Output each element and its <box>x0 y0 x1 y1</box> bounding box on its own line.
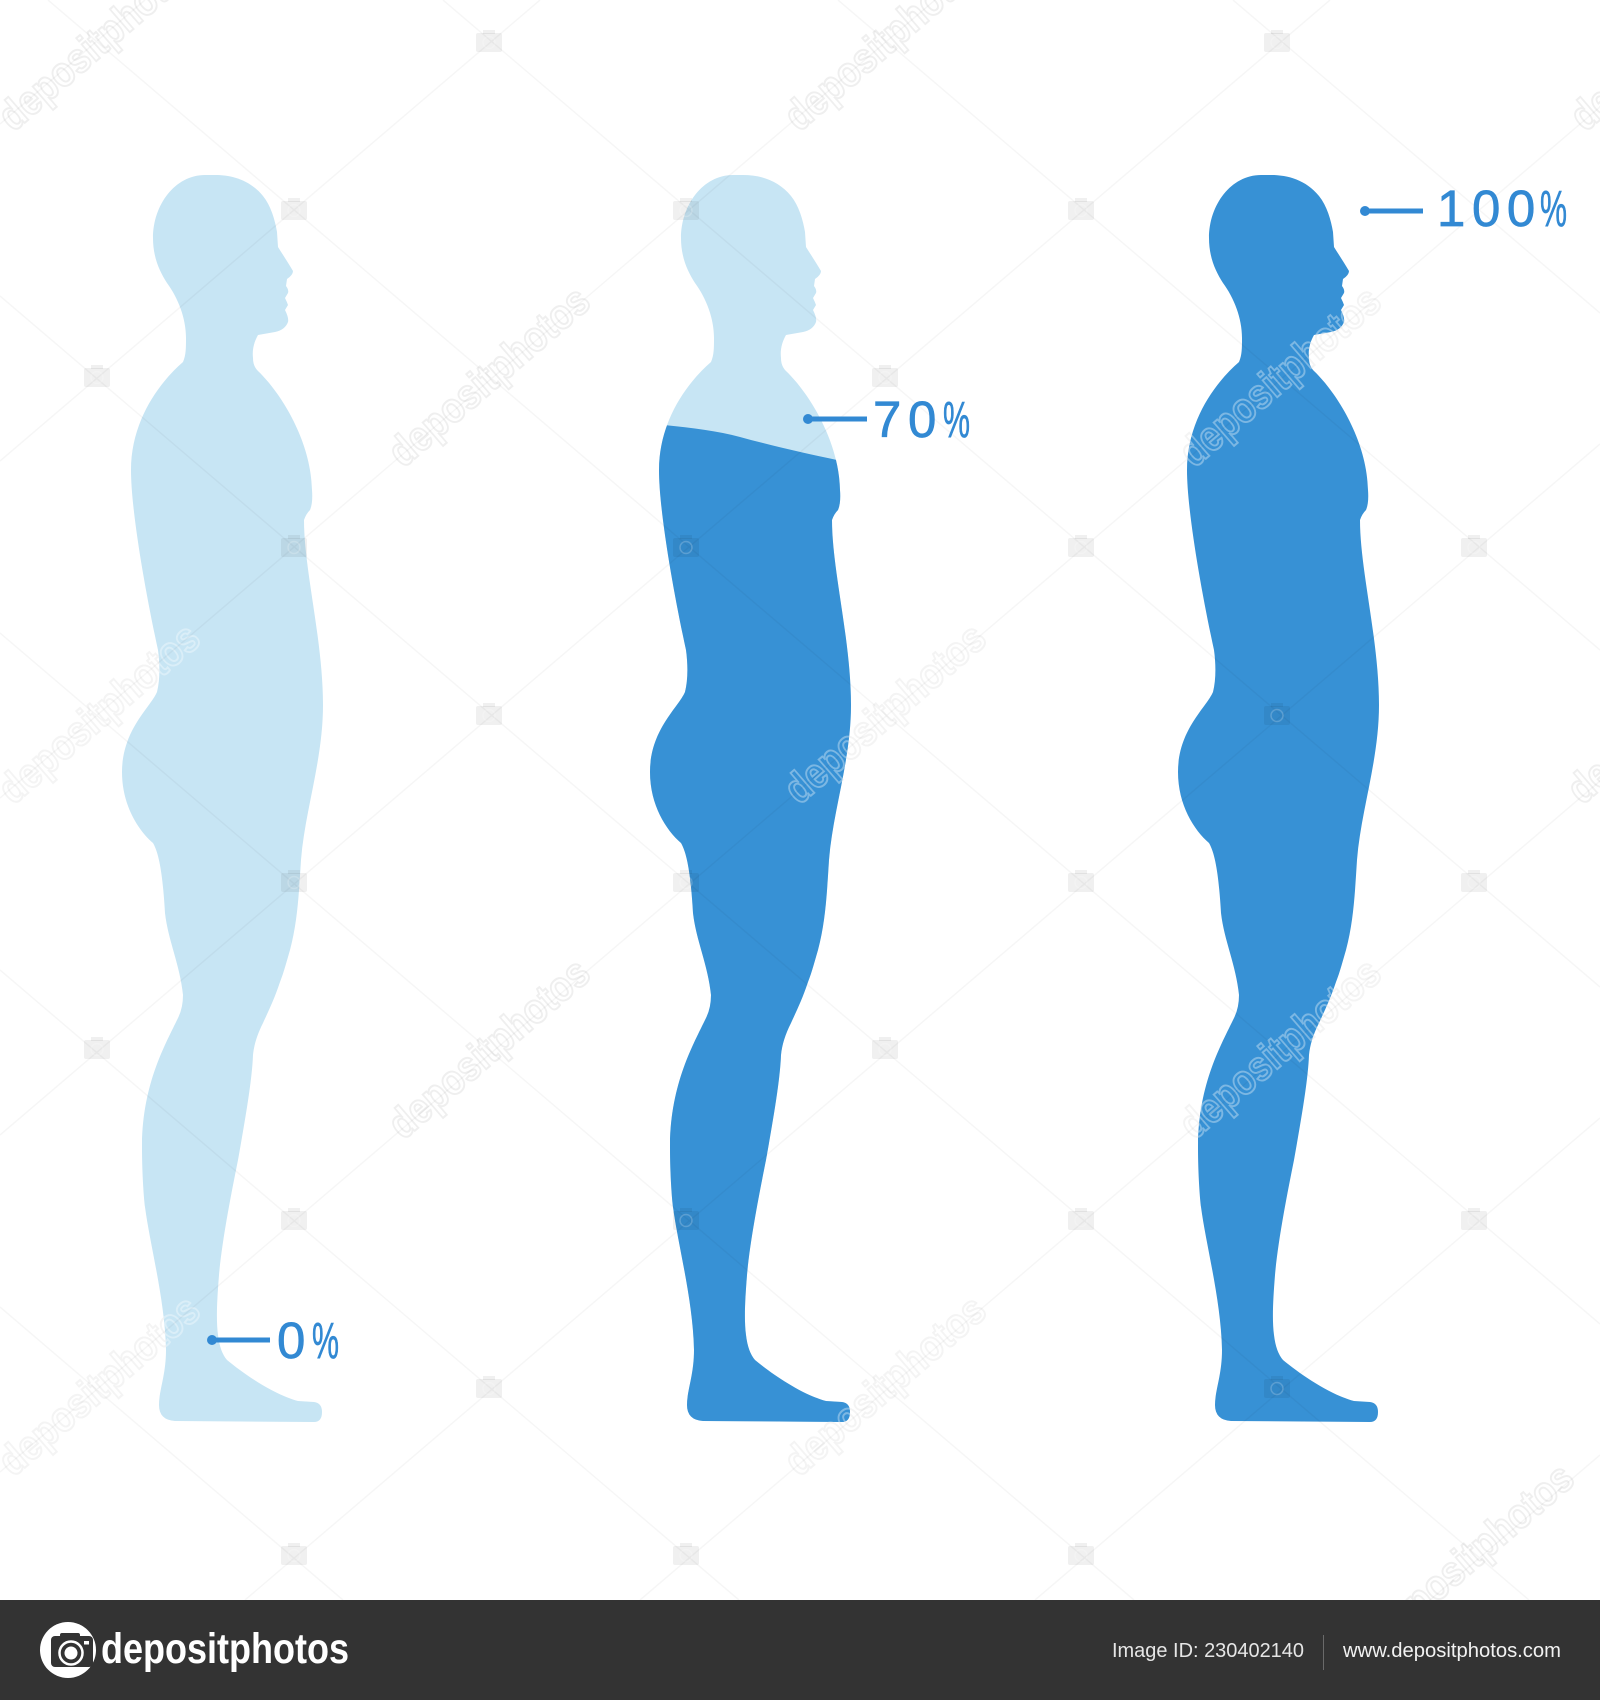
figure: 100% hydration, fully filled silhouette <box>1178 175 1379 1422</box>
callout: 0% <box>207 1312 339 1369</box>
watermark text over figures: depositphotos <box>775 1286 995 1484</box>
watermark text behind figures: depositphotos <box>1170 949 1390 1147</box>
figure: 70% hydration, filled to the chest <box>650 175 851 1422</box>
watermark text behind figures: depositphotos <box>379 949 599 1147</box>
watermark text over figures <box>0 277 1390 1484</box>
callout: 0%: 0 <box>277 1312 305 1369</box>
watermark text over figures: depositphotos <box>1170 277 1390 475</box>
website url: www.depositphotos.com <box>1342 1639 1561 1662</box>
footer bar <box>0 1600 1600 1700</box>
callout: 70% <box>803 391 970 448</box>
logo wordmark: depositphotos <box>101 1625 349 1673</box>
image id: Image ID: 230402140 <box>1112 1639 1304 1662</box>
watermark text behind figures: depositphotos <box>775 614 995 812</box>
callout: 100% <box>1360 180 1567 237</box>
figure: 0% hydration, empty light silhouette <box>122 175 323 1422</box>
watermark text behind figures: depositphotos <box>775 1286 995 1484</box>
callout: 100%: 100 <box>1437 180 1542 237</box>
watermark text behind figures: depositphotos <box>1170 277 1390 475</box>
callout: 0%: % <box>312 1312 339 1369</box>
watermark text over figures: depositphotos <box>775 614 995 812</box>
watermark text behind figures: depositphotos <box>379 277 599 475</box>
icon: camera logo <box>40 1622 96 1678</box>
watermark camera icons <box>84 30 1487 1565</box>
callout: 70%: % <box>943 391 970 448</box>
callout: 70%: 70 <box>873 391 943 448</box>
callout: 100%: % <box>1540 180 1567 237</box>
watermark text over figures: depositphotos <box>1170 949 1390 1147</box>
